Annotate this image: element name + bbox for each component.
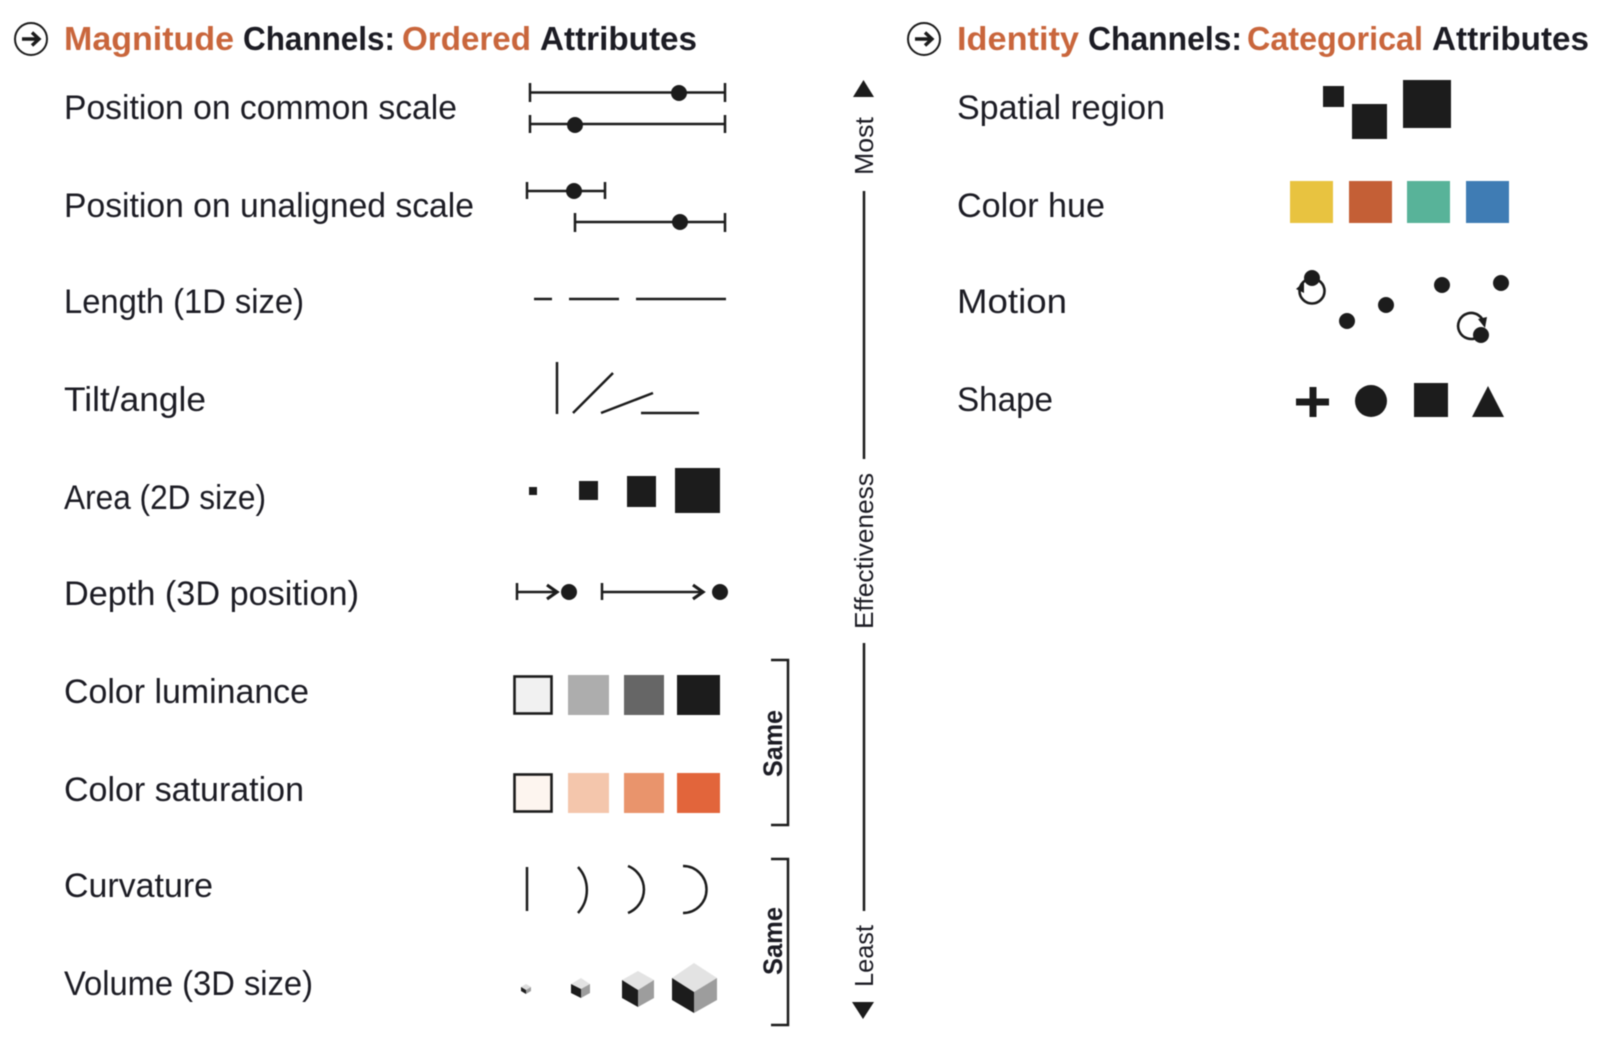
effectiveness axis: Most (849, 116, 879, 175)
icon: right heading arrow (908, 23, 940, 55)
chart: color hue swatches (1290, 181, 1509, 223)
bracket: curvature and volume (758, 859, 788, 1025)
icon: left heading arrow (15, 23, 47, 55)
panel: identity channels (908, 20, 1589, 419)
bracket: curvature and volume: Same (758, 907, 788, 975)
row label: depth: Depth (3D position) (64, 575, 359, 613)
heading: identity channels (957, 20, 1589, 57)
heading: identity channels: Categorical (1247, 20, 1423, 57)
row label: tilt/angle: Tilt/angle (64, 381, 206, 419)
effectiveness axis (849, 80, 879, 1019)
heading: magnitude channels: Channels: (243, 20, 395, 57)
chart: saturation swatches (514, 773, 720, 813)
row label: position on unaligned scale: Position on unaligned scale (64, 187, 474, 225)
heading: magnitude channels: Attributes (540, 20, 697, 57)
heading: magnitude channels (64, 20, 697, 57)
chart: spatial region squares (1323, 80, 1451, 139)
row label: position on common scale: Position on common scale (64, 89, 457, 127)
row label: spatial region: Spatial region (957, 89, 1165, 127)
chart: motion dots (1296, 270, 1509, 343)
row label: curvature: Curvature (64, 867, 213, 905)
effectiveness axis: Least (849, 924, 879, 987)
chart: tilt lines (557, 362, 699, 414)
bracket: luminance and saturation: Same (758, 710, 788, 777)
chart: position on unaligned scale (527, 182, 725, 232)
row label: shape: Shape (957, 381, 1053, 419)
chart: volume cubes (521, 963, 717, 1013)
chart: position on common scale (530, 83, 725, 133)
row label: color luminance: Color luminance (64, 673, 309, 711)
heading: identity channels: Channels: (1088, 20, 1242, 57)
effectiveness axis: Effectiveness (849, 473, 879, 629)
row label: area: Area (2D size) (64, 479, 266, 517)
heading: magnitude channels: Ordered (402, 20, 531, 57)
row label: volume: Volume (3D size) (64, 965, 313, 1003)
chart: length lines (534, 298, 726, 300)
chart: depth arrows (517, 583, 728, 600)
panel: magnitude channels (15, 20, 728, 1013)
chart: area squares (529, 468, 720, 513)
row label: motion: Motion (957, 283, 1067, 321)
heading: identity channels: Attributes (1432, 20, 1589, 57)
row label: color hue: Color hue (957, 187, 1105, 225)
row label: color saturation: Color saturation (64, 771, 304, 809)
bracket: luminance and saturation (758, 660, 788, 825)
heading: magnitude channels: Magnitude (64, 20, 234, 57)
row label: length: Length (1D size) (64, 283, 304, 321)
chart: luminance swatches (514, 675, 720, 715)
heading: identity channels: Identity (957, 20, 1080, 57)
chart: shape marks (1296, 383, 1504, 417)
chart: curvature arcs (527, 866, 706, 913)
